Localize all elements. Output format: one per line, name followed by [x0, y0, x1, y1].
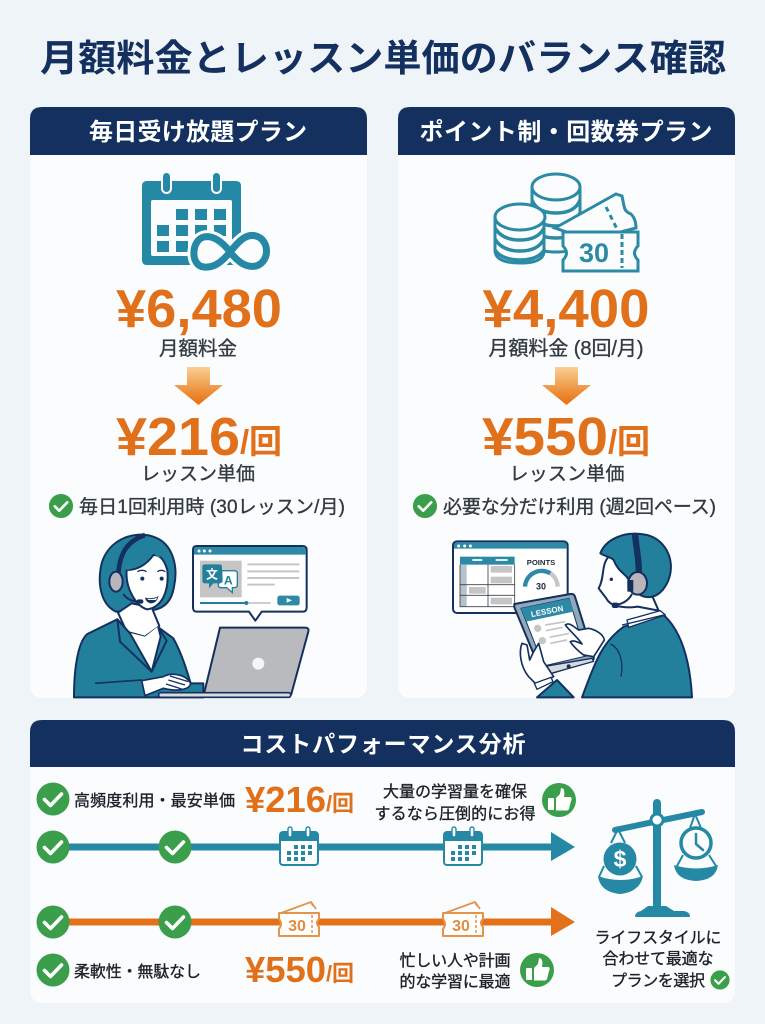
- panel heading: unlimited plan: [30, 107, 367, 155]
- per lesson price: ¥216: [116, 407, 240, 467]
- monthly price: ¥6,480: [116, 279, 282, 339]
- note: usage as needed: 必要な分だけ利用 (週2回ペース): [443, 496, 716, 518]
- arrow: down: [174, 367, 223, 405]
- timeline: points plan: [36, 902, 575, 938]
- timeline: unlimited plan: [36, 827, 575, 865]
- row: unlimited summary: 高頻度利用・最安単価: [74, 792, 235, 810]
- row: points summary: 的な学習に最適: [400, 973, 510, 991]
- row: unlimited summary: 大量の学習量を確保: [383, 783, 527, 801]
- per lesson label: レッスン単価: [141, 463, 255, 485]
- row: points summary: 柔軟性・無駄なし: [74, 963, 201, 981]
- per lesson price: /回: [240, 423, 282, 460]
- per lesson label: レッスン単価: [510, 463, 624, 485]
- illustration: woman with laptop: A: [224, 574, 233, 588]
- arrow: down: [542, 367, 591, 405]
- icon: calendar with infinity: [142, 172, 266, 267]
- text: choose by lifestyle: プランを選択: [611, 972, 705, 990]
- row: points summary: /回: [326, 961, 354, 986]
- per lesson price: ¥550: [482, 407, 608, 467]
- panel: monthly unlimited plan: [30, 107, 367, 698]
- panel heading: points plan: ポイント制・回数券プラン: [420, 119, 712, 146]
- panel: cost performance analysis: [30, 720, 735, 1003]
- row: unlimited summary: ¥216: [245, 779, 326, 820]
- illustration: man with tablet: POINTS: [527, 558, 555, 567]
- row: points summary: ¥550: [245, 949, 326, 990]
- monthly price label: 月額料金 (8回/月): [488, 337, 644, 360]
- text: choose by lifestyle: 合わせて最適な: [602, 950, 714, 968]
- icon: coins and tickets: 30: [579, 238, 609, 268]
- per lesson price: /回: [608, 423, 650, 460]
- illustration: man with tablet: LESSON: [530, 604, 564, 619]
- text: choose by lifestyle: [594, 929, 730, 990]
- panel: points and tickets plan: [398, 107, 735, 698]
- row: points summary: 忙しい人や計画: [400, 952, 510, 970]
- text: choose by lifestyle: ライフスタイルに: [594, 929, 722, 947]
- row: unlimited summary: するなら圧倒的にお得: [374, 805, 536, 823]
- monthly price: ¥4,400: [482, 279, 650, 339]
- title: 月額料金とレッスン単価のバランス確認: [40, 38, 726, 79]
- illustration: man with tablet: 30: [536, 581, 546, 591]
- illustration: man with tablet: [453, 534, 692, 697]
- panel heading: cost performance: [30, 720, 735, 767]
- icon: balance scale: $: [614, 846, 627, 872]
- panel heading: unlimited plan: 毎日受け放題プラン: [89, 119, 307, 146]
- illustration: woman with laptop: [74, 535, 309, 697]
- row: points summary: [36, 949, 554, 991]
- panel heading: points plan: [398, 107, 735, 155]
- row: unlimited summary: [36, 779, 576, 823]
- icon: coins and tickets: [495, 174, 638, 271]
- row: unlimited summary: /回: [326, 791, 354, 816]
- illustration: woman with laptop: 文: [206, 566, 218, 581]
- note: usage daily: 毎日1回利用時 (30レッスン/月): [79, 496, 345, 518]
- monthly price label: 月額料金: [159, 338, 237, 360]
- icon: balance scale: [598, 799, 718, 917]
- panel heading: cost performance: コストパフォーマンス分析: [240, 731, 526, 757]
